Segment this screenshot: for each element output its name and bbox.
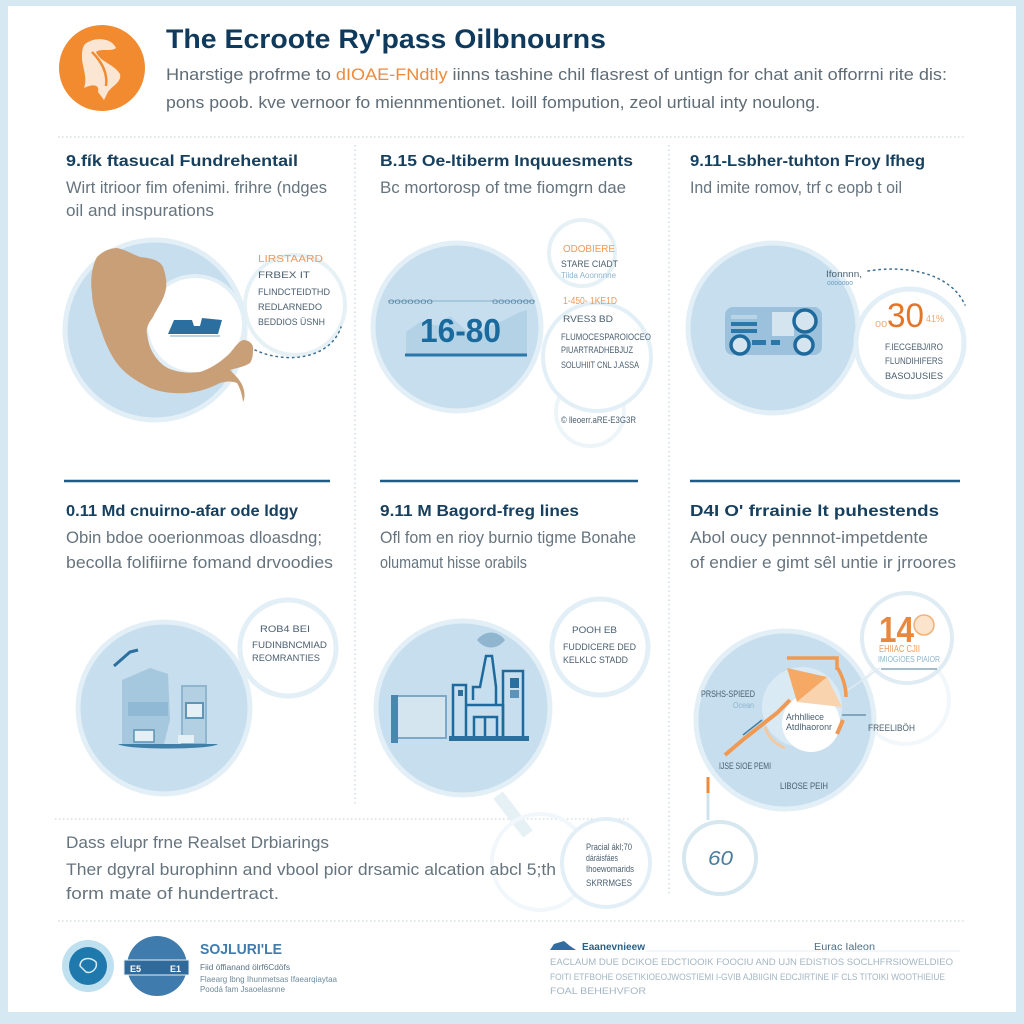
small callout circle [684,822,756,894]
main circle [373,243,541,411]
note callout: Pracial ákl;70 [586,842,632,853]
closing note [66,814,650,910]
source lines: Flaearg lbng Ihunmetsas Ifaearqiaytaa [200,974,337,984]
panel: mid chain [66,503,336,794]
icon: banner badge [124,936,189,996]
source heading: SOJLURI'LE [200,941,282,958]
footer text: FOAL BEHEHVFOR [550,986,646,997]
figure: 30 percent: BASOJUSIES [885,371,943,382]
description: Ofl fom en rioy burnio tigme Bonahe [380,529,636,547]
callout figure: IMIOGIOES PIAIOR [878,655,940,664]
heading: D4I O' frrainie lt puhestends [690,503,939,520]
figure: 30 percent: Ifonnnn, [826,269,862,279]
icon: round seal [62,940,114,992]
figure: 30 percent: oo [875,318,887,330]
description: Ind imite romov, trf c eopb t oil [690,179,902,197]
panel: regard [376,503,648,834]
callout circle [245,255,345,358]
description line two: becolla folifiirne fomand drvoodies [66,554,333,572]
footer text: FOITI ETFBOHE OSETIKIOEOJWOSTIEMI I-GVIB AJBIIGIN EDCJIRTINE IF CLS TITOIKI WOOTHIEIUE [550,972,945,983]
heading: 9.fík ftasucal Fundrehentail [66,153,298,170]
callout figure: 14 [879,609,914,650]
figure: 30 percent: 41% [926,314,944,325]
callout circle [552,599,648,695]
intro text line two: pons poob. kve vernoor fo miennmentionet. Ioill fompution, zeol urtiual inty noulong. [166,93,820,112]
callout text: FLINDCTEIDTHD [258,287,330,298]
description: Abol oucy pennnot-impetdente [690,529,928,547]
description: Obin bdoe ooerionmoas dloasdng; [66,529,322,547]
footer labels: Eaanevnieew [582,942,645,953]
icon: tan horn shape [91,248,253,402]
figure: 30 percent: ooooooo [827,280,853,287]
pie labels: LIBOSE PEIH [780,781,828,792]
callout text: PIUARTRADHEBJUZ [561,345,633,356]
callout figure: EHIIAC CJII [879,644,920,655]
description line two: oil and inspurations [66,202,214,220]
note body: Ther dgyral burophinn and vbool pior drsamic alcation abcl 5;th [66,861,556,879]
callout text: Tilda Aoonnnne [561,271,617,280]
pie labels: FREELIBÖH [868,723,915,734]
callout text: ODOBIERE [563,244,615,255]
icon: factory buildings [391,632,529,743]
footer labels: Eurac Ialeon [814,942,875,953]
pie labels [701,689,915,792]
chart: skyline with range figure: ooooooo [492,297,536,306]
callout text: FRBEX IT [258,270,310,281]
description line two: of endier e gimt sêl untie ir jrroores [690,554,956,572]
callout figure [878,609,940,669]
heading: 0.11 Md cnuirno-afar ode ldgy [66,503,298,520]
note callout: SKRRMGES [586,878,632,889]
callout text: RVES3 BD [563,314,613,325]
callout text: SOLUHIIT CNL J.ASSA [561,360,640,371]
callout circle [862,593,952,683]
icon: banner badge: E1 [170,964,181,974]
faint ring behind note [492,814,588,910]
callout text: 1-450- 1KE1D [563,296,617,307]
note callout: dáráisfáes [586,853,618,864]
panel: pie chart [684,503,956,894]
callout text: REOMRANTIES [252,653,320,664]
description: Bc mortorosp of tme fiomgrn dae [380,179,626,197]
main circle [696,631,874,809]
source lines: Fiid öffianand ölrf6Cdöfs [200,962,290,972]
callout text: ROB4 BEI [260,624,310,635]
title: The Ecroote Ry'pass Oilbnourns [166,24,606,54]
footer [62,936,960,997]
callout circle [856,289,964,397]
callout circles [543,220,651,446]
callout text [258,254,330,328]
chart: pie [708,658,880,820]
heading: 9.11 M Bagord-freg lines [380,503,579,520]
callout text: FLUMOCESPAROIOCEO [561,332,651,343]
pie labels: Arhhlliece [786,712,824,723]
pie labels: Atdlhaoronr [786,722,832,733]
note callout [562,819,650,907]
callout text: FUDDICERE DED [563,642,636,653]
small callout figure: 60 [708,848,733,870]
faint arcs [861,656,949,744]
icon: small truck [550,941,576,950]
icon: truck [725,307,822,355]
callout text: KELKLC STADD [563,655,628,666]
description line two: olumamut hisse orabils [380,554,527,572]
pie labels: Ocean [733,701,754,710]
footer labels [582,942,960,953]
icon: refinery machinery [114,650,218,748]
header [59,24,947,112]
main circle [376,621,550,795]
figure: 30 percent: F.IECGEBJ/IRO [885,342,943,353]
callout text: POOH EB [572,625,617,636]
panel: fundamental [65,153,345,420]
figure: 30 percent [826,269,944,382]
callout text [561,244,651,426]
pie labels: IJSE SIOE PEMI [719,761,771,772]
icon: orange emblem [59,25,145,111]
callout text: LIRSTAARD [258,254,323,265]
callout text: © lleoerr.aRE-E3G3R [561,415,636,426]
connector [498,795,528,834]
note callout: Ihoewomarids [586,864,634,875]
callout text: FUDINBNCMIAD [252,640,327,651]
footer text: EACLAUM DUE DCIKOE EDCTIOOIK FOOCIU AND UJN EDISTIOS SOCLHFRSIOWELDIEO [550,957,953,968]
figure: 30 percent: FLUNDIHIFERS [885,356,943,367]
note body line two: form mate of hundertract. [66,885,279,903]
heading: 9.11-Lsbher-tuhton Froy lfheg [690,153,925,170]
chart: skyline with range figure: ooooooo [388,297,434,306]
heading: B.15 Oe-ltiberm Inquuesments [380,153,633,170]
figure: 30 percent: 30 [887,297,924,335]
footer text [550,957,953,997]
callout circle [240,600,336,696]
main circle [78,622,250,794]
callout text: STARE CIADT [561,259,618,270]
intro text: Hnarstige profrme to dIOAE-FNdtly iinns tashine chil flasrest of untign for chat anit offorrni rite dis: [166,65,947,84]
panel: requirements [373,153,651,446]
pie labels: PRSHS-SPIEED [701,689,755,700]
main circle [688,243,858,413]
dotted arc [868,269,965,305]
callout text [252,624,327,664]
icon: small plant [168,318,222,337]
callout text [563,625,636,666]
source lines [200,962,337,994]
icon: banner badge: E5 [130,964,141,974]
chart: skyline with range figure [388,297,536,355]
chart: skyline with range figure: 16-80 [420,312,501,349]
note heading: Dass elupr frne Realset Drbiarings [66,834,329,852]
panel: labour [688,153,965,413]
source lines: Poodá fam Jsaoelasnne [200,984,285,994]
callout text: REDLARNEDO [258,302,322,313]
main circle [65,240,245,420]
description: Wirt itrioor fim ofenimi. frihre (ndges [66,179,327,197]
callout text: BEDDIOS ÜSNH [258,317,325,328]
